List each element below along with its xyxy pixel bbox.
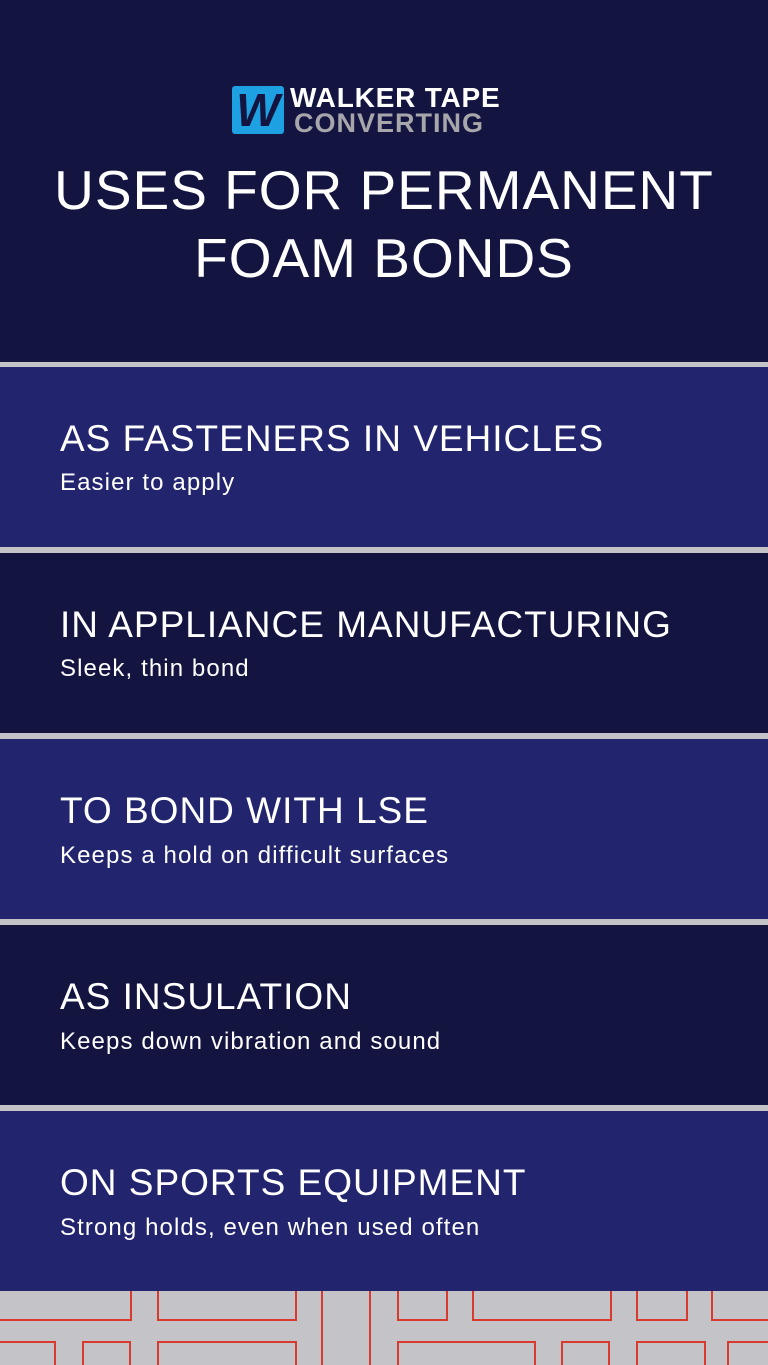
panel: appliance: IN APPLIANCE MANUFACTURING bbox=[60, 604, 672, 645]
panel: insulation: Keeps down vibration and sound bbox=[60, 1028, 441, 1055]
panel: vehicles bbox=[0, 367, 768, 547]
logo text: WALKER TAPE bbox=[290, 82, 501, 113]
panel: sports: ON SPORTS EQUIPMENT bbox=[60, 1162, 526, 1203]
header panel bbox=[0, 0, 768, 362]
panel: sports bbox=[0, 1111, 768, 1291]
panel: vehicles: Easier to apply bbox=[60, 469, 235, 496]
title bbox=[54, 159, 714, 289]
panel: LSE: TO BOND WITH LSE bbox=[60, 790, 429, 831]
panel: appliance bbox=[0, 553, 768, 733]
panel: insulation: AS INSULATION bbox=[60, 976, 352, 1017]
logo: CONVERTING bbox=[294, 108, 484, 138]
panel: vehicles: AS FASTENERS IN VEHICLES bbox=[60, 418, 604, 459]
title: FOAM BONDS bbox=[194, 227, 574, 289]
panel: LSE: Keeps a hold on difficult surfaces bbox=[60, 842, 449, 869]
bottom pattern bbox=[0, 1291, 768, 1365]
panel: insulation bbox=[0, 925, 768, 1105]
title: USES FOR PERMANENT bbox=[54, 159, 714, 221]
icon: W logo: W bbox=[236, 84, 280, 136]
panel: LSE bbox=[0, 739, 768, 919]
panel: appliance: Sleek, thin bond bbox=[60, 655, 250, 682]
logo bbox=[232, 82, 501, 138]
panel: sports: Strong holds, even when used often bbox=[60, 1214, 480, 1241]
